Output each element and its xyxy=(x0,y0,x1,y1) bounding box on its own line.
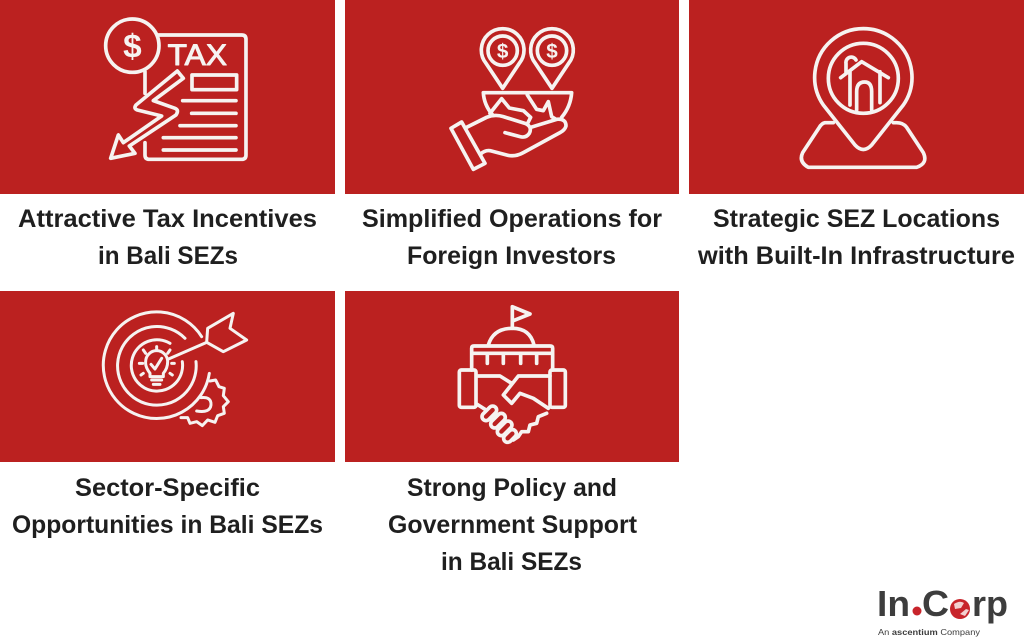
icon: target with arrow, bulb and gear xyxy=(103,312,247,426)
icon: hand holding globe and pins xyxy=(451,29,573,169)
logo tagline: An ascentium Company xyxy=(878,627,981,637)
subheading: sector opportunities: Opportunities in Bali SEZs xyxy=(12,511,323,539)
icon: tax document: $ xyxy=(123,29,142,66)
panel: sector opportunities xyxy=(0,291,335,539)
icon: government building and handshake xyxy=(459,307,565,444)
subheading: tax incentives: in Bali SEZs xyxy=(98,242,238,270)
panel: government support xyxy=(345,291,679,576)
heading: sector opportunities: Sector-Specific xyxy=(75,474,260,502)
icon: tax document xyxy=(106,19,246,159)
subheading: strategic locations: with Built-In Infrastructure xyxy=(697,242,1015,270)
heading: simplified operations: Simplified Operations for xyxy=(362,205,662,233)
heading: strategic locations: Strategic SEZ Locations xyxy=(713,205,1000,233)
subheading: government support line two: Government Support xyxy=(388,511,638,539)
icon: globe xyxy=(950,599,970,619)
subheading: simplified operations: Foreign Investors xyxy=(407,242,616,270)
logo: InCorp: C xyxy=(922,583,949,624)
logo: InCorp: In xyxy=(877,583,910,624)
logo: InCorp: rp xyxy=(972,583,1008,624)
icon: location pin with house xyxy=(801,29,925,167)
subheading: government support line three: in Bali SEZs xyxy=(441,548,582,576)
heading: tax incentives: Attractive Tax Incentives xyxy=(18,205,317,233)
icon: hand holding globe and pins: $ xyxy=(497,40,509,63)
panel: simplified operations xyxy=(345,0,679,270)
heading: government support line one: Strong Policy and xyxy=(407,474,617,502)
logo: InCorp xyxy=(877,583,1008,637)
panel: tax incentives xyxy=(0,0,335,270)
panel: strategic locations xyxy=(689,0,1024,270)
icon: tax document: TAX xyxy=(168,39,227,72)
icon: hand holding globe and pins: $ xyxy=(546,40,558,63)
